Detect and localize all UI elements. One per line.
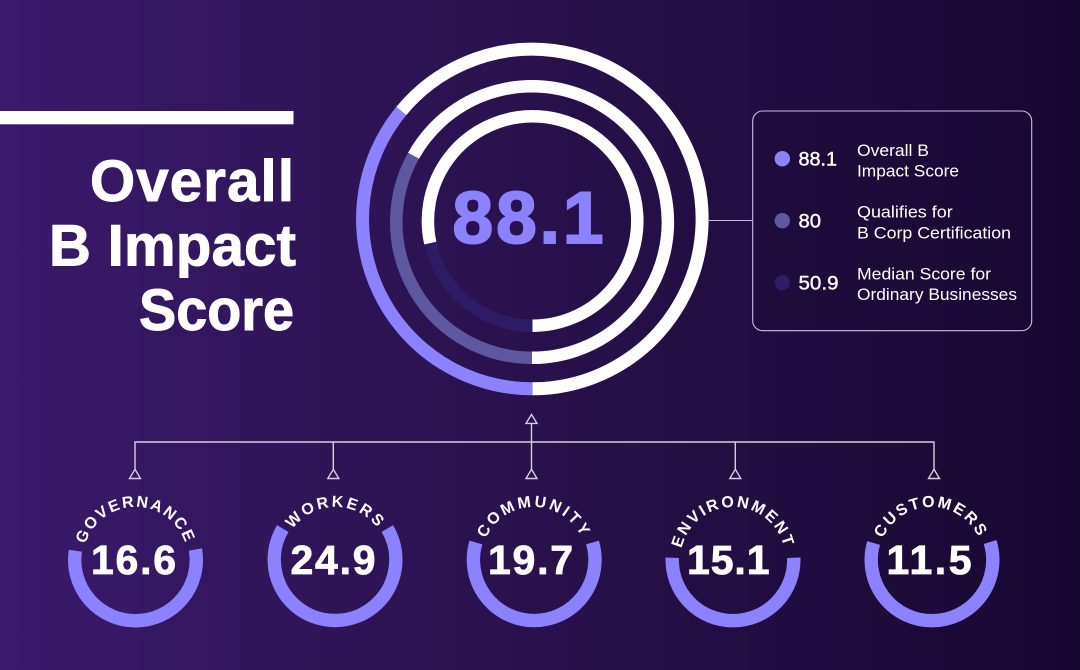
gauge: environment — [666, 496, 800, 628]
legend item: 88.1: Overall B — [857, 142, 929, 160]
legend item: 88.1: Impact Score — [857, 163, 959, 181]
gauge: community — [466, 496, 602, 628]
legend frame — [753, 111, 1032, 331]
legend item: 50.9: 50.9 — [798, 273, 838, 295]
arrow: governance — [130, 469, 140, 478]
legend item: 80: 80 — [798, 211, 821, 233]
title line: B Impact: B Impact — [49, 214, 296, 279]
arrow: community — [526, 469, 537, 478]
gauge: governance: GOVERNANCE — [76, 496, 195, 542]
outer ring: 88.1 — [363, 49, 702, 389]
inner ring: 50.9 — [428, 116, 637, 326]
legend item: 80: Qualifies for — [857, 203, 953, 221]
concentric score rings — [363, 49, 702, 389]
gauge: workers: 24.9 — [290, 537, 376, 583]
gauge: environment: 15.1 — [687, 537, 770, 583]
legend item: 80: B Corp Certification — [857, 224, 1011, 242]
gauge: community: COMMUNITY — [478, 496, 591, 536]
title rule — [0, 111, 294, 124]
gauge: environment: ENVIRONMENT — [671, 496, 794, 548]
legend item: 80 — [775, 203, 1011, 242]
connector: ring to legend — [709, 220, 753, 222]
title line: Score: Score — [139, 278, 294, 343]
gauge: governance — [68, 496, 203, 628]
gauge: customers — [864, 496, 1000, 628]
middle ring: 80 — [396, 86, 668, 358]
title line: Overall: Overall — [90, 149, 294, 214]
legend item: 88.1: 88.1 — [798, 149, 837, 171]
gauge: customers: CUSTOMERS — [874, 496, 986, 536]
gauge: workers — [268, 496, 403, 628]
arrow: up to overall score — [526, 414, 537, 423]
legend item: 50.9: Ordinary Businesses — [857, 286, 1017, 304]
legend item: 88.1 — [775, 142, 959, 181]
gauge: governance: 16.6 — [91, 537, 176, 583]
connector tree with arrows — [130, 414, 940, 478]
central score: 88.1 — [452, 178, 604, 259]
title block — [0, 111, 296, 343]
legend item: 50.9: Median Score for — [857, 265, 992, 283]
arrow: customers — [928, 469, 940, 478]
legend panel — [753, 111, 1032, 331]
legend item: 50.9 — [775, 265, 1017, 304]
arrow: workers — [328, 469, 339, 478]
gauge: community: 19.7 — [488, 537, 573, 583]
gauge: customers: 11.5 — [886, 537, 972, 583]
arrow: environment — [730, 469, 741, 478]
gauge: workers: WORKERS — [284, 496, 384, 527]
